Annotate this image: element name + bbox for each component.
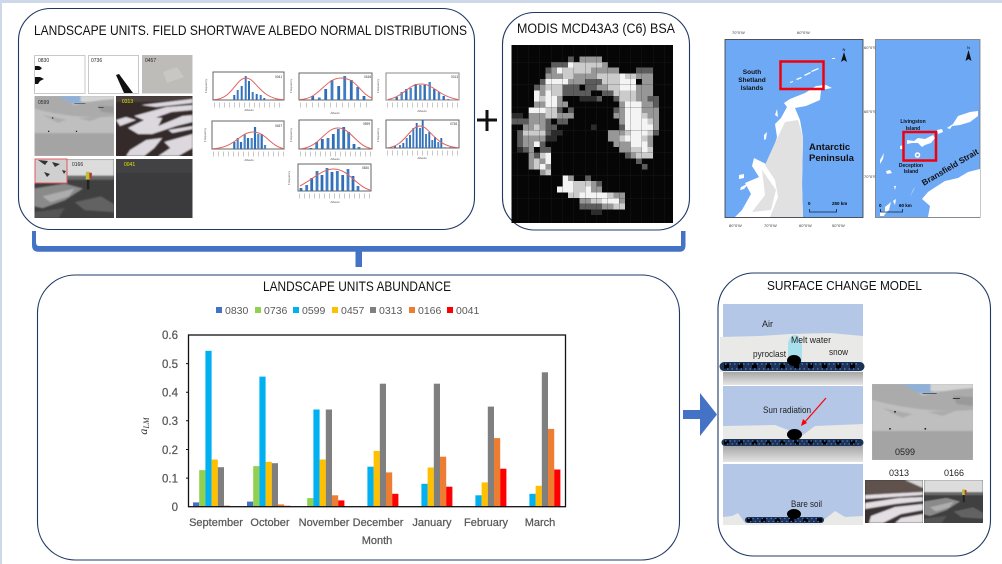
- photo grid of landscape units: 0041: [124, 162, 135, 168]
- histogram 0041: [204, 72, 284, 112]
- y axis labels: 0.6: [162, 330, 178, 342]
- north arrow: [966, 45, 972, 61]
- month labels: [189, 517, 555, 529]
- histogram 0830: Frequency: [287, 170, 291, 185]
- scale bar: 250 km: [832, 201, 847, 206]
- histogram 0457: Frequency: [203, 127, 207, 142]
- scale bar: 60 km: [899, 203, 912, 208]
- photo: 0313: [865, 480, 923, 523]
- north arrow: [841, 47, 847, 62]
- panel: landscape units abundance: [38, 275, 680, 560]
- arrow to surface change model: [683, 393, 717, 436]
- map labels: Antarctic: [809, 142, 850, 153]
- photo grid of landscape units: 0830: [38, 58, 49, 64]
- y axis title: a: [136, 429, 150, 435]
- histogram 0830: Albedo: [330, 200, 340, 204]
- legend: 0457: [341, 305, 365, 317]
- map labels: Peninsula: [809, 153, 855, 164]
- heading: surface change: SURFACE CHANGE MODEL: [767, 278, 922, 293]
- heading: landscape units: LANDSCAPE UNITS. FIELD SHORTWAVE ALBEDO NORMAL DISTRIBUTIONS: [34, 22, 467, 38]
- histogram 0599: Frequency: [289, 127, 293, 142]
- map labels: Livingston: [900, 119, 926, 125]
- red locator box: [780, 62, 824, 89]
- bar chart: [136, 330, 566, 547]
- y axis labels: [162, 330, 179, 514]
- scale bar: 0: [879, 203, 882, 208]
- diagram stage 3: bare soil: [723, 464, 863, 525]
- Bransfield Strait label: Bransfield Strait: [920, 146, 980, 188]
- photo label 0166: 0166: [944, 468, 964, 478]
- histogram 0736: Frequency: [376, 127, 380, 142]
- histogram 0736: 0736: [450, 122, 457, 126]
- photo: 0166: [924, 480, 983, 523]
- photo grid of landscape units: 0166: [72, 162, 83, 168]
- axis labels: 60°0'W: [797, 30, 810, 35]
- y axis labels: 0.4: [162, 388, 179, 400]
- map labels: South: [743, 69, 761, 76]
- heading: MODIS: MODIS MCD43A3 (C6) BSA: [517, 21, 675, 36]
- diagram stage 1: melt water: Melt water: [791, 335, 831, 346]
- panel: landscape units field albedo: [18, 8, 474, 230]
- land: [735, 85, 832, 217]
- histogram 0041: 0041: [275, 75, 282, 79]
- map labels: Island: [906, 126, 920, 132]
- axis labels: 60°0'W: [799, 223, 812, 228]
- histogram 0457: [203, 121, 284, 162]
- photo grid of landscape units: 0457: [145, 58, 156, 64]
- chart frame: [188, 335, 566, 507]
- histogram 0736: [376, 120, 459, 160]
- map: Antarctic Peninsula: [725, 30, 876, 228]
- axis labels: [729, 30, 876, 228]
- y axis labels: 0.5: [162, 359, 178, 371]
- diagram stage 3: bare soil: Bare soil: [791, 499, 822, 510]
- axis labels: 65°0'S: [864, 109, 876, 114]
- histogram 0830: 0830: [362, 166, 369, 170]
- month labels: December: [353, 517, 404, 529]
- x axis title: Month: [362, 535, 392, 547]
- month labels: September: [189, 517, 243, 529]
- histogram 0313: 0313: [451, 75, 458, 79]
- legend: 0830: [225, 305, 249, 317]
- axis labels: 70°0'W: [764, 223, 777, 228]
- land: [922, 169, 980, 217]
- histogram 0166: Albedo: [330, 111, 340, 115]
- albedo raster map: [512, 45, 673, 223]
- y axis title: LM: [142, 416, 151, 430]
- histogram 0599: [289, 120, 372, 161]
- legend: 0736: [264, 305, 288, 317]
- bracket connecting top panels to abundance panel: [32, 231, 686, 267]
- histogram 0166: [289, 73, 372, 115]
- histogram 0313: [376, 73, 459, 113]
- legend: 0166: [418, 305, 442, 317]
- scale bar: 0: [808, 201, 811, 206]
- y axis labels: 0.3: [162, 416, 178, 428]
- red arrow: [801, 398, 826, 426]
- north arrow: N: [842, 47, 846, 52]
- axis labels: 80°0'W: [729, 223, 742, 228]
- y axis labels: 0.1: [162, 474, 178, 486]
- histogram 0166: Frequency: [289, 78, 293, 93]
- heading: abundance: LANDSCAPE UNITS ABUNDANCE: [263, 279, 451, 294]
- scale bar: [879, 203, 912, 212]
- panel: surface change model: [718, 273, 990, 556]
- histogram 0599: 0599: [363, 122, 370, 126]
- legend: 0041: [456, 305, 480, 317]
- legend: [216, 305, 480, 317]
- map: Livingston and Deception Islands: [876, 40, 980, 218]
- histogram 0166: 0166: [364, 75, 371, 79]
- histogram 0457: 0457: [275, 124, 282, 128]
- axis labels: 70°0'S: [864, 174, 876, 179]
- photo grid of landscape units: 0313: [122, 99, 133, 105]
- legend: 0313: [379, 305, 403, 317]
- diagram stage 1: melt water: Air: [762, 319, 773, 330]
- month labels: November: [299, 517, 350, 529]
- photo: 0599: [872, 384, 973, 460]
- histogram 0313: Albedo: [417, 109, 427, 113]
- map labels: Shetland: [738, 77, 766, 84]
- photo grid of landscape units: 0599: [38, 100, 49, 106]
- photo grid of landscape units: 0736: [91, 58, 102, 64]
- photo grid of landscape units: [34, 55, 192, 218]
- histogram 0599: Albedo: [330, 157, 340, 161]
- month labels: October: [250, 517, 290, 529]
- map labels: Islands: [741, 85, 764, 92]
- diagram stage 1: melt water: pyroclast: [753, 349, 786, 360]
- scale bar: [808, 201, 847, 212]
- diagram stage 2: sun radiation: Sun radiation: [763, 405, 811, 416]
- panel: MODIS BSA: [502, 12, 690, 230]
- diagram stage 1: melt water: [720, 304, 863, 385]
- photo: 0599: 0599: [895, 447, 915, 457]
- photo label 0313: 0313: [889, 468, 909, 478]
- map labels: [738, 69, 855, 164]
- histogram 0457: Albedo: [244, 158, 254, 162]
- month labels: January: [412, 517, 452, 529]
- north arrow: N: [967, 45, 970, 50]
- month labels: March: [525, 517, 555, 529]
- histogram 0313: Frequency: [376, 78, 380, 93]
- map labels: [899, 119, 926, 175]
- y axis labels: 0.2: [162, 445, 178, 457]
- histogram 0830: [287, 164, 371, 204]
- red locator box: [904, 132, 936, 160]
- plus sign: [477, 110, 497, 131]
- histogram 0041: Albedo: [244, 108, 254, 112]
- axis labels: 70°0'W: [732, 30, 745, 35]
- axis labels: 50°0'W: [832, 223, 845, 228]
- map labels: Deception: [899, 163, 923, 169]
- histogram 0041: Frequency: [204, 78, 208, 93]
- axis labels: 60°0'S: [864, 45, 876, 50]
- map labels: Island: [904, 169, 918, 175]
- y axis labels: 0: [172, 502, 178, 514]
- legend: 0599: [302, 305, 326, 317]
- month labels: February: [464, 517, 509, 529]
- diagram stage 2: sun radiation: [723, 386, 863, 462]
- histogram 0736: Albedo: [417, 156, 427, 160]
- diagram stage 1: melt water: snow: [829, 347, 848, 358]
